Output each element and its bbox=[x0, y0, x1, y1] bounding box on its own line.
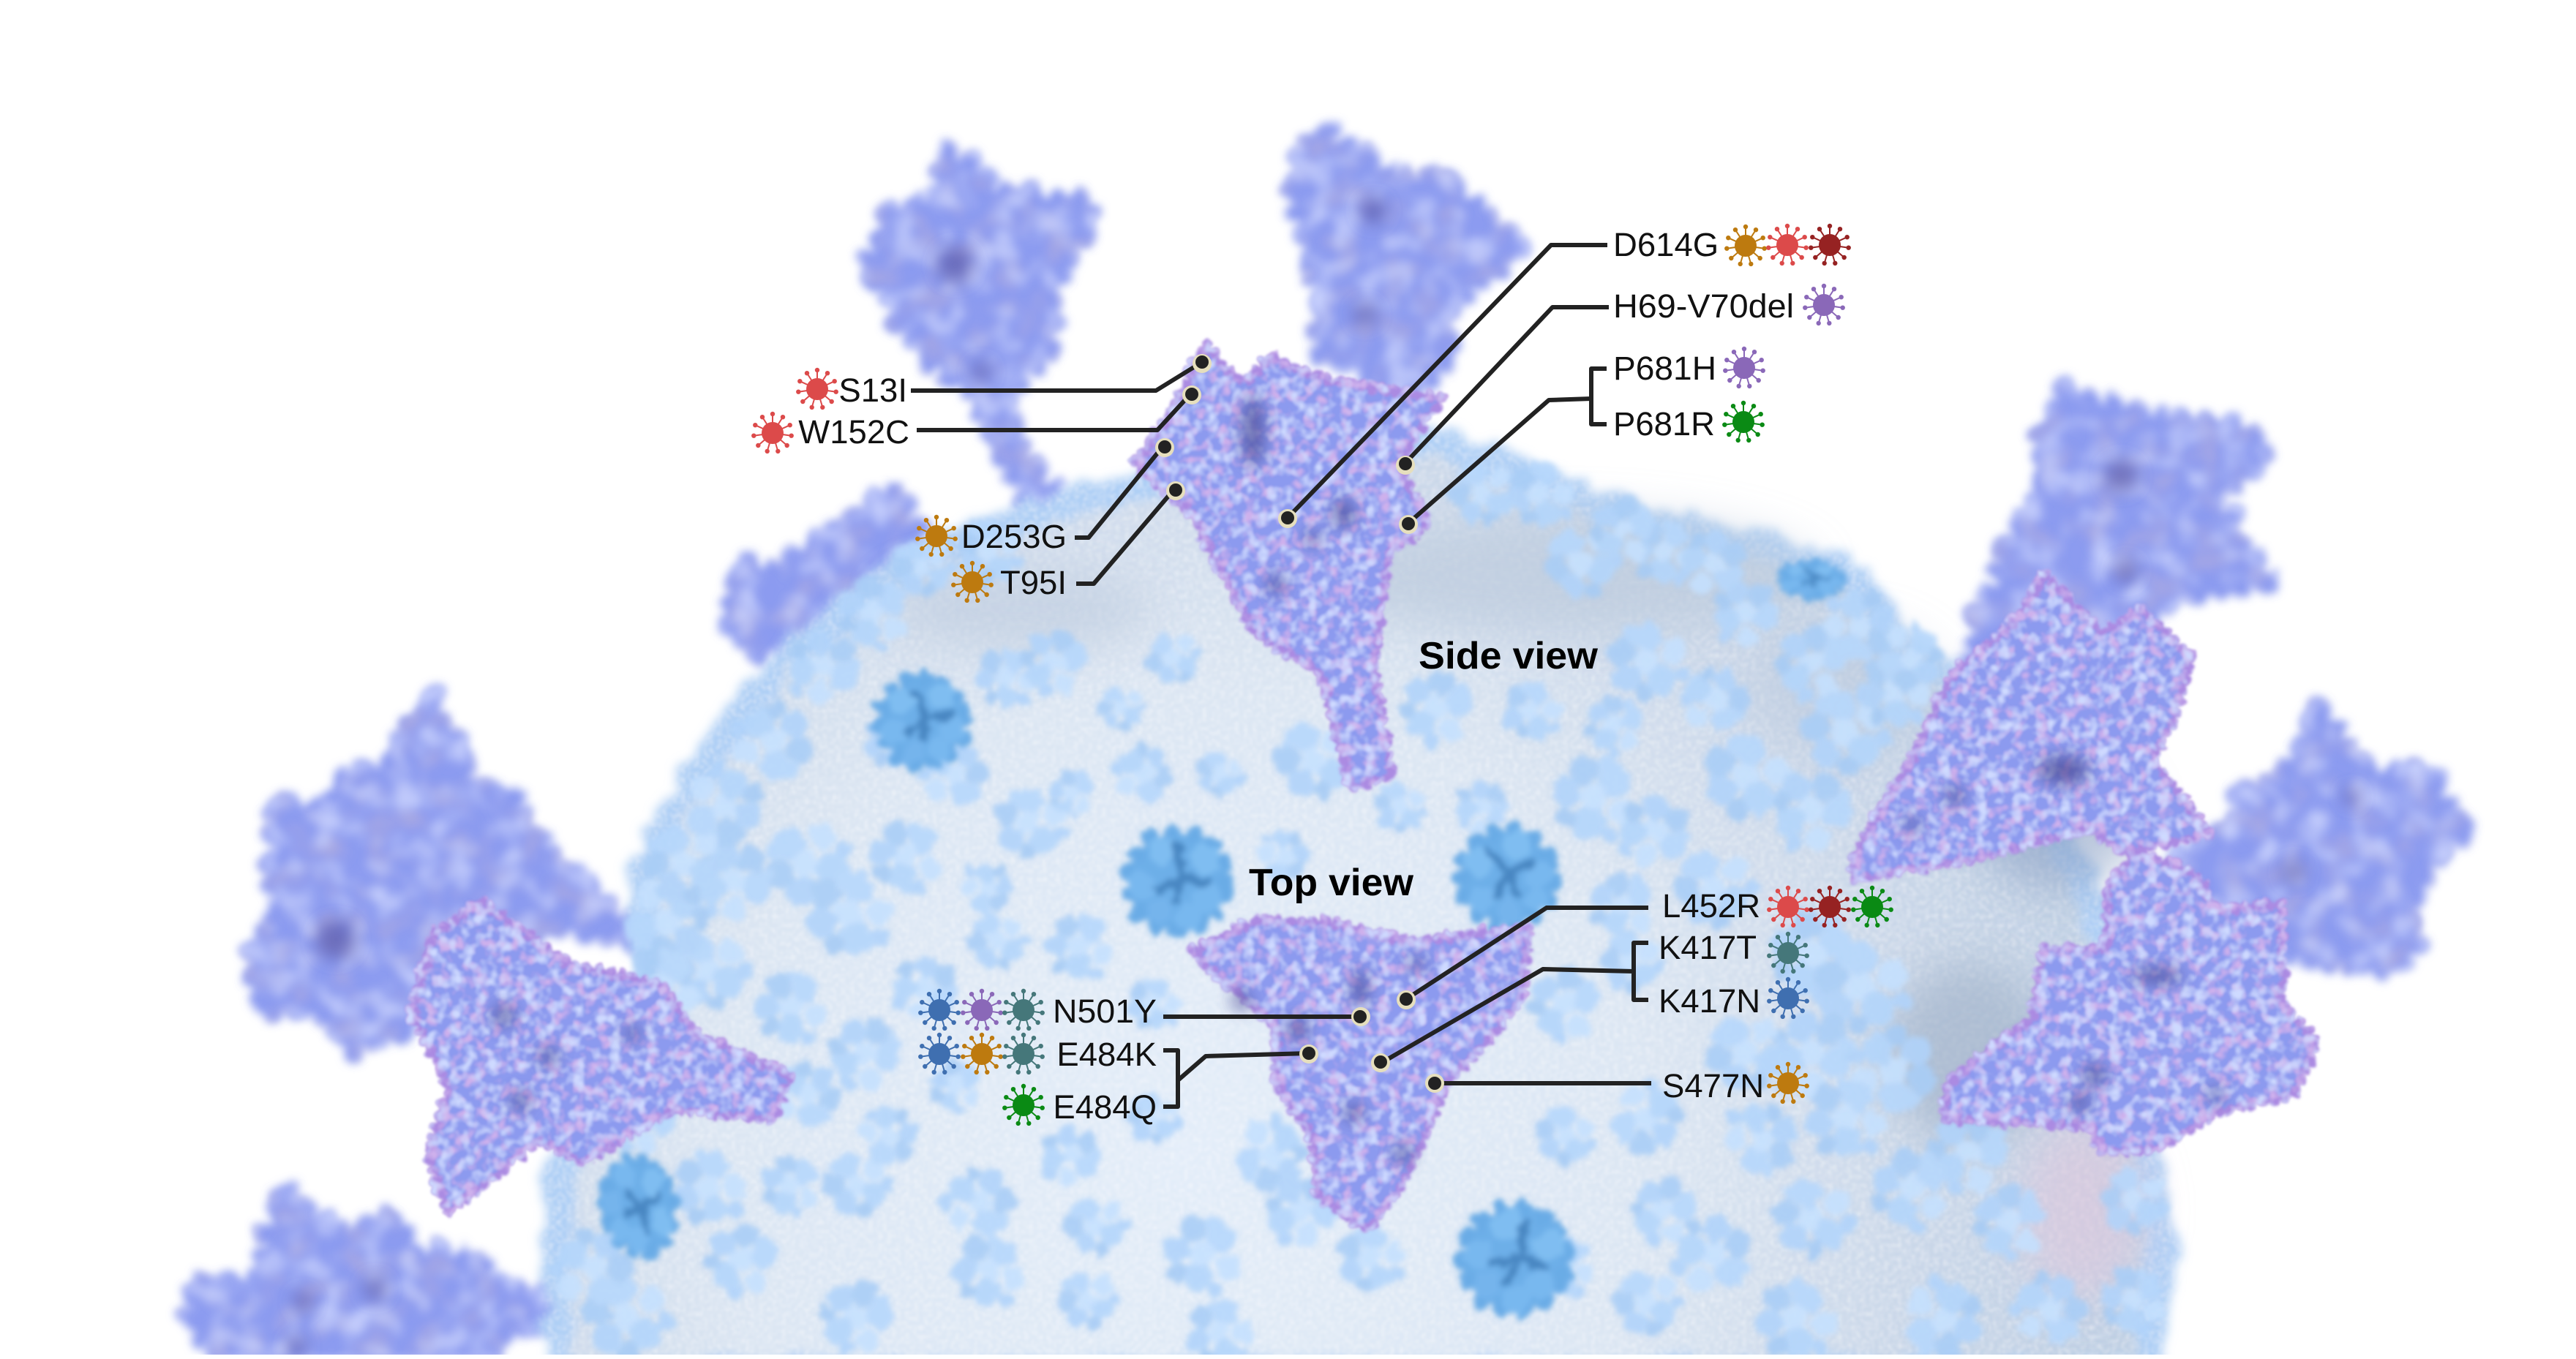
callout: S13I: S13I bbox=[838, 372, 907, 409]
foreground spikes (in focus) bbox=[412, 344, 2317, 1230]
spike crevices bbox=[492, 395, 2223, 1164]
heading: Side view: Side view bbox=[1419, 635, 1599, 677]
back spike shading bbox=[287, 197, 2360, 1356]
spike: right upper foreground bbox=[1855, 574, 2210, 879]
bottom crop edge bbox=[0, 1355, 2576, 1359]
callout: N501Y: N501Y bbox=[1053, 993, 1157, 1030]
spike: top view bbox=[1193, 920, 1528, 1230]
callout: E484K / E484Q bbox=[918, 1033, 1318, 1126]
heading: Top view: Top view bbox=[1249, 862, 1414, 904]
virus body bbox=[555, 443, 2160, 1359]
callout: D253G bbox=[915, 438, 1174, 557]
callout: L452R bbox=[1397, 886, 1893, 1009]
callout: D253G: D253G bbox=[961, 518, 1067, 555]
callout: D614G: D614G bbox=[1613, 226, 1719, 263]
spike proteins on the surface (light clusters) bbox=[539, 449, 2180, 1359]
callout: K417T / K417N: K417T bbox=[1659, 929, 1757, 966]
callout: H69-V70del bbox=[1396, 284, 1845, 475]
callout: W152C bbox=[751, 385, 1201, 453]
spike: left foreground bbox=[412, 902, 790, 1213]
callout: K417T / K417N: K417N bbox=[1659, 982, 1760, 1020]
M-protein clusters (dark blue) bbox=[597, 562, 1842, 1330]
callout: P681H / P681R: P681R bbox=[1613, 405, 1715, 443]
spike: right lower foreground bbox=[1943, 853, 2317, 1151]
body shading bbox=[890, 516, 2146, 1300]
callout: H69-V70del: H69-V70del bbox=[1613, 287, 1794, 325]
callout: E484K / E484Q: E484K bbox=[1056, 1036, 1157, 1073]
callout: P681H / P681R: P681H bbox=[1613, 350, 1716, 387]
callout: K417T / K417N bbox=[1371, 929, 1809, 1072]
callout: T95I: T95I bbox=[1000, 564, 1067, 601]
callout: S477N: S477N bbox=[1662, 1067, 1764, 1104]
callout: E484K / E484Q: E484Q bbox=[1053, 1088, 1157, 1126]
callout: W152C: W152C bbox=[798, 413, 909, 451]
spike: side view bbox=[1135, 344, 1441, 788]
callout: L452R: L452R bbox=[1662, 887, 1760, 925]
callout: P681H / P681R bbox=[1399, 347, 1765, 534]
callout: T95I bbox=[951, 481, 1185, 603]
callout: S13I bbox=[796, 354, 1212, 410]
callout: D614G bbox=[1278, 224, 1851, 528]
callout: N501Y bbox=[918, 989, 1370, 1031]
callout: S477N bbox=[1425, 1062, 1809, 1104]
